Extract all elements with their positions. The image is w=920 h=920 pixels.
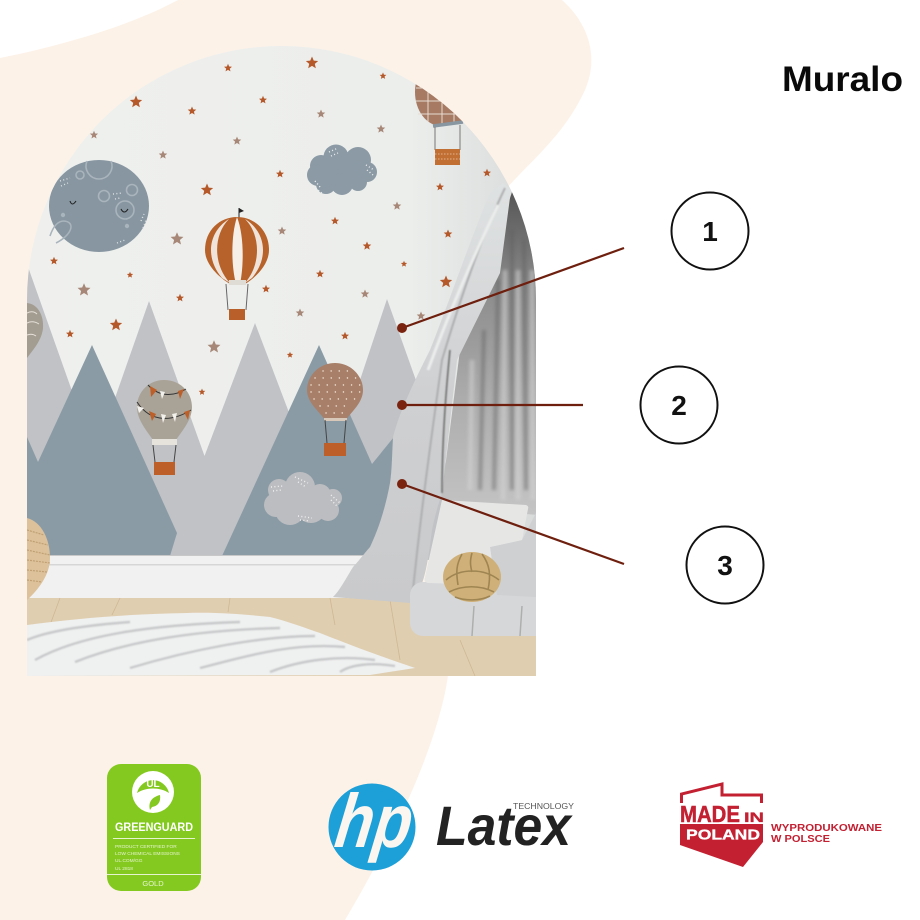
logo: HP Latex Technology bbox=[328, 779, 574, 870]
moon with face bbox=[49, 160, 149, 252]
logo: Greenguard Gold bbox=[107, 764, 201, 891]
orange striped hot air balloon bbox=[205, 208, 269, 320]
light grey mountains bbox=[27, 264, 480, 560]
number badge 1: 1 bbox=[702, 216, 718, 247]
blue cloud bbox=[307, 144, 377, 195]
brand wordmark: Muralo bbox=[782, 60, 903, 99]
logo: Made in Poland: POLAND bbox=[686, 828, 760, 844]
wicker basket bbox=[27, 518, 50, 600]
number badge 2 bbox=[640, 366, 718, 444]
number badge 3: 3 bbox=[717, 550, 733, 581]
yellow knot cushion bbox=[443, 552, 501, 602]
callout 2: pointer line and marker bbox=[397, 400, 583, 410]
logo: Greenguard Gold: UL.COM/GG bbox=[115, 858, 143, 864]
logo: Made in Poland: WYPRODUKOWANE bbox=[771, 822, 882, 834]
logo: Made in Poland: IN bbox=[744, 809, 764, 825]
logo: Made in Poland: MADE bbox=[680, 801, 740, 827]
logo: Greenguard Gold: GREENGUARD bbox=[115, 822, 193, 834]
callout 1: pointer line and marker bbox=[397, 248, 624, 333]
wooden floor bbox=[27, 598, 536, 676]
logo: Greenguard Gold: UL 2818 bbox=[115, 866, 133, 872]
checked balloon top right bbox=[415, 84, 464, 165]
wall background bbox=[27, 40, 536, 560]
grey pillow bbox=[490, 514, 536, 582]
number badge 2: 2 bbox=[671, 390, 687, 421]
light grey cloud bbox=[264, 472, 342, 525]
brown dotted balloon bbox=[307, 363, 363, 456]
number badge 1 bbox=[672, 192, 748, 270]
logo: Greenguard Gold: LOW CHEMICAL EMISSIONS bbox=[115, 851, 180, 857]
logo: HP Latex Technology: hp bbox=[331, 779, 419, 864]
callout 3: pointer line and marker bbox=[397, 479, 624, 564]
logo: Made in Poland: W POLSCE bbox=[771, 833, 830, 845]
grey bunting balloon bbox=[137, 380, 192, 475]
quilted rug bbox=[27, 613, 415, 676]
stars bbox=[50, 56, 491, 395]
left edge balloon bbox=[27, 303, 43, 358]
white pillow bbox=[424, 500, 528, 585]
logo: HP Latex Technology: TECHNOLOGY bbox=[513, 801, 574, 811]
logo: Greenguard Gold: PRODUCT CERTIFIED FOR bbox=[115, 844, 177, 850]
logo: HP Latex Technology: Latex bbox=[436, 794, 574, 857]
skirting board bbox=[27, 555, 377, 599]
logo: Greenguard Gold: GOLD bbox=[142, 879, 164, 888]
logo: Greenguard Gold: UL bbox=[146, 779, 160, 790]
panel: arched wall mural photo bbox=[27, 40, 550, 676]
curtain back folds bbox=[440, 192, 540, 515]
background shape: peach blob bbox=[0, 0, 591, 920]
blue grey mountains bbox=[27, 345, 420, 556]
floor mattress bbox=[410, 582, 550, 636]
logo: Made in Poland bbox=[680, 784, 882, 867]
number badge 3 bbox=[686, 526, 764, 604]
curtain front drape bbox=[333, 183, 511, 603]
